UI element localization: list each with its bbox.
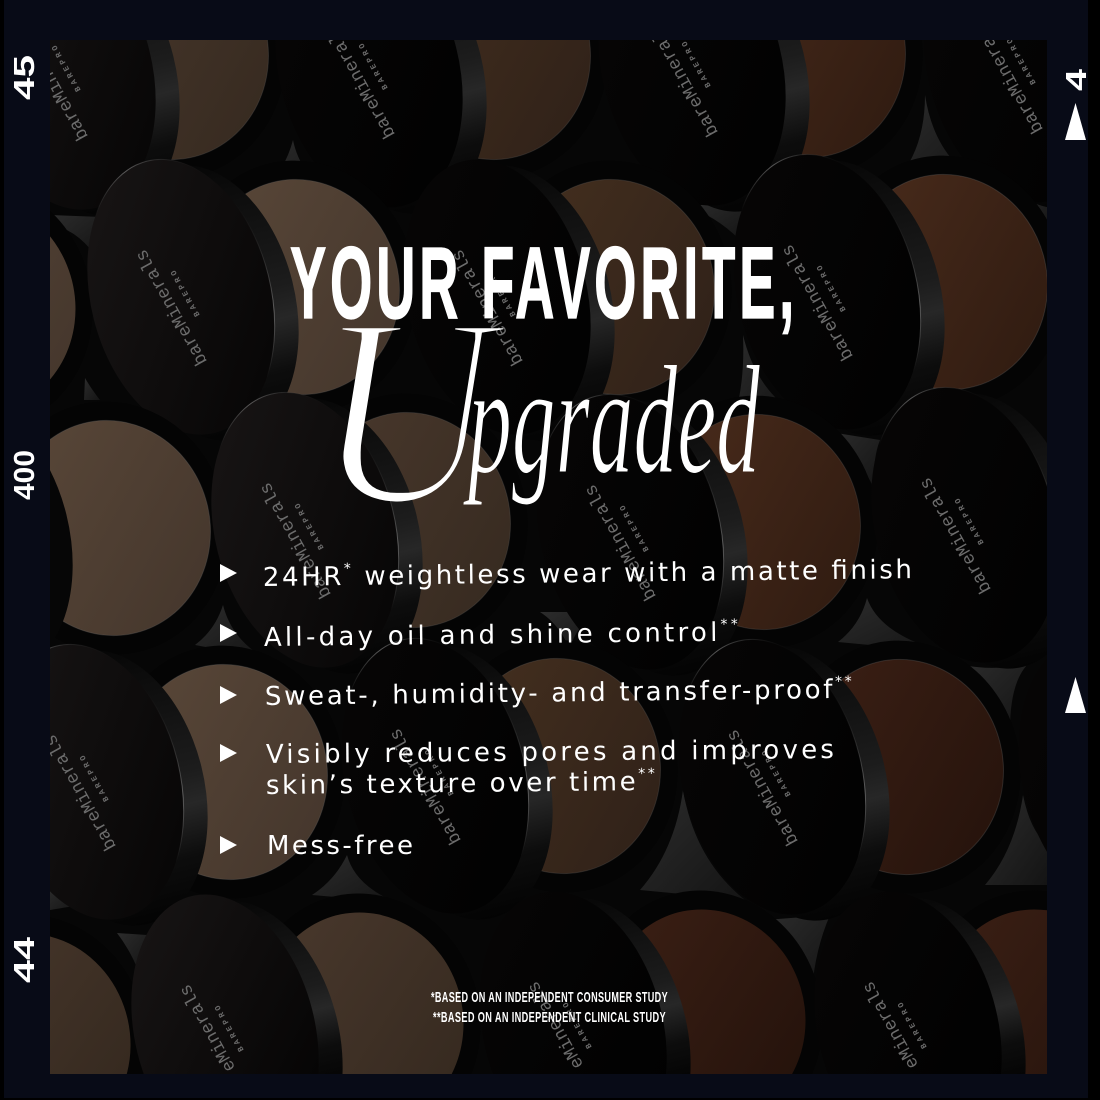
benefits list [220, 554, 912, 861]
compact row 2, C: BAREPRO [814, 261, 848, 313]
left film edge [0, 0, 4, 1100]
compact row 3, left pan [50, 408, 211, 636]
compact row 5, B [530, 890, 814, 1074]
compact row 5, C: BAREPRO [895, 998, 929, 1050]
compact row 4, C: bareMinerals [723, 725, 804, 848]
compact row 3, B: BAREPRO [617, 501, 651, 553]
film number: 400: 400 [9, 450, 41, 500]
compact row 3, A: BAREPRO [292, 499, 326, 551]
script lowercase: pgraded [462, 334, 760, 506]
compact row 4, A [50, 644, 328, 906]
compact row 1, D [984, 40, 1047, 207]
bullet arrow 4 [220, 744, 237, 762]
benefit 4, line 2: ** [638, 766, 655, 782]
bullet arrow 2 [220, 624, 237, 642]
compact row 2, A: BAREPRO [168, 266, 202, 318]
script subtitle [316, 262, 760, 561]
benefit 4, line 1: Visibly reduces pores and improves [266, 735, 834, 770]
film number: 45: 45 [9, 55, 41, 100]
film number: 44: 44 [9, 937, 41, 983]
benefit 1: * [344, 561, 351, 577]
compact row 1, D: bareMinerals [968, 13, 1049, 136]
compact row 5, B: eMinerals [524, 977, 589, 1072]
compact row 4, B [352, 638, 661, 874]
compact row 3, A [212, 392, 511, 650]
compact row 3, C [872, 387, 1047, 668]
compact row 1, C: bareMinerals [643, 16, 724, 139]
compact row 2, B [454, 179, 714, 395]
compact row 1, C [652, 40, 906, 212]
bullet arrow 1 [220, 564, 237, 582]
compact row 5, A: eMinerals [176, 980, 241, 1075]
metallic wedges between compacts [50, 95, 1047, 990]
footnotes [431, 989, 668, 1026]
script capital: U [316, 262, 509, 561]
compact row 5, A: BAREPRO [212, 1001, 246, 1053]
compact row 1, A: BAREPRO [49, 41, 83, 93]
benefit 1: 24HR [263, 562, 342, 593]
benefit 3: Sweat-, humidity- and transfer-proof [265, 675, 833, 712]
film marker triangle, middle [1065, 677, 1086, 713]
benefit 2: All-day oil and shine control [264, 618, 718, 653]
compact row 3, B: bareMinerals [581, 480, 662, 603]
benefit 2: ** [720, 617, 738, 633]
compact row 2, B: bareMinerals [448, 245, 529, 368]
compact row 2, A: bareMinerals [132, 245, 213, 368]
compact row 5, A [132, 894, 464, 1074]
compact row 3, C: bareMinerals [916, 473, 997, 596]
compact row 1, B: BAREPRO [356, 39, 390, 91]
compact row 5, C: eMinerals [859, 977, 924, 1072]
compact row 5, C [865, 910, 1047, 1074]
compact row 5, B: BAREPRO [560, 998, 594, 1050]
compact row 3, B [548, 394, 868, 630]
compact row 2, B: BAREPRO [484, 266, 518, 318]
right film edge [1088, 0, 1100, 1100]
bullet arrow 5 [220, 836, 237, 854]
compact row 4, C: BAREPRO [759, 746, 793, 798]
compact row 1, A [50, 40, 269, 160]
benefit 3: ** [835, 674, 852, 690]
bullet arrow 3 [220, 686, 237, 704]
compact row 4, A: BAREPRO [77, 751, 111, 803]
benefit 5: Mess-free [267, 831, 413, 861]
compact row 1, B [328, 40, 591, 200]
compact row 3, A: bareMinerals [256, 478, 337, 601]
benefit 4, line 2: skin’s texture over time [266, 767, 636, 801]
film marker triangle, top [1065, 103, 1086, 140]
compact row 2, offscreen left pan [50, 215, 76, 380]
compact row 2, C [736, 154, 1047, 390]
compact row 4, B: bareMinerals [386, 724, 467, 847]
compact row 5, left pan [50, 936, 130, 1074]
compact row 1, B: bareMinerals [320, 18, 401, 141]
compact row 4, D [1038, 835, 1047, 852]
compact row 2, C: bareMinerals [778, 240, 859, 363]
compact row 4, B: BAREPRO [422, 745, 456, 797]
compact row 1, C: BAREPRO [679, 37, 713, 89]
film number: 4: 4 [1061, 69, 1093, 91]
compact row 2, A [88, 159, 400, 412]
bottom film edge [0, 1098, 1100, 1100]
compact row 4, C [683, 639, 1010, 920]
footnote 1: *BASED ON AN INDEPENDENT CONSUMER STUDY [431, 989, 668, 1006]
compact row 3, C: BAREPRO [952, 494, 986, 546]
footnote 2: **BASED ON AN INDEPENDENT CLINICAL STUDY [433, 1009, 666, 1026]
compact row 4, A: bareMinerals [41, 730, 122, 853]
compact row 1, D: BAREPRO [1004, 34, 1038, 86]
compact row 1, A: bareMinerals [13, 20, 94, 143]
benefit 1: weightless wear with a matte finish [353, 555, 912, 592]
